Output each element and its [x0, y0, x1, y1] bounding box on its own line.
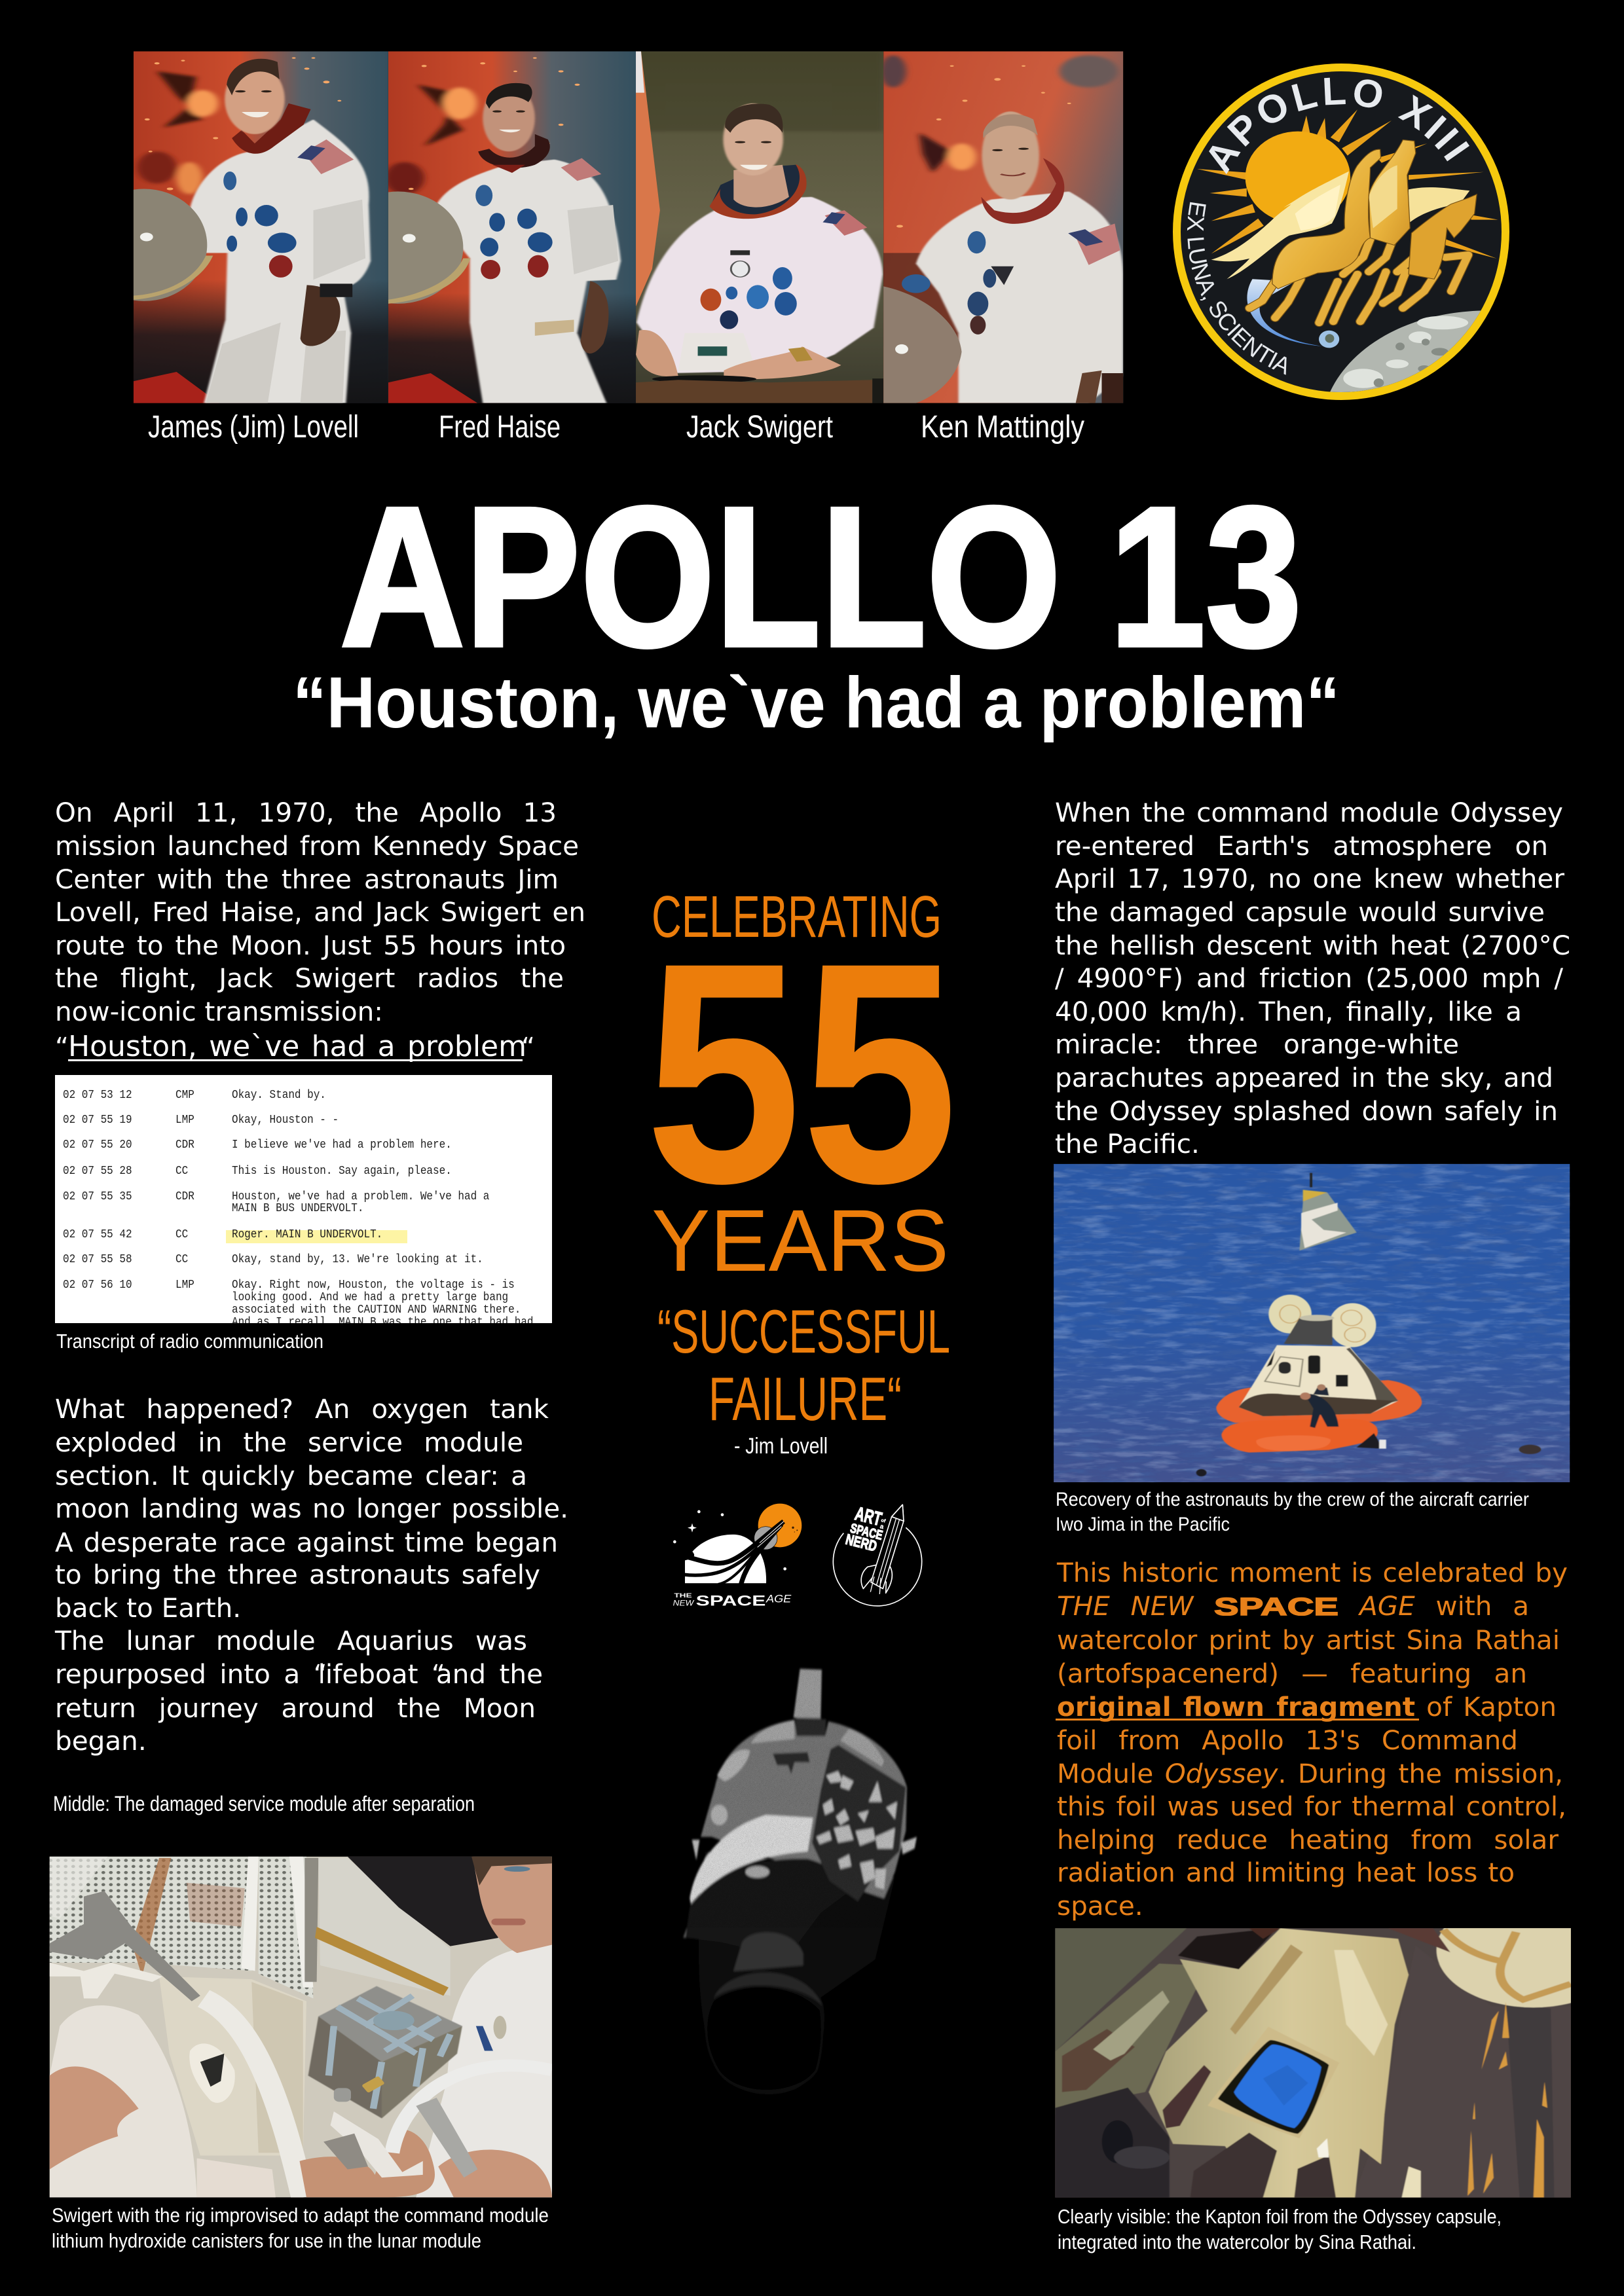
- quote: successful failure: “SUCCESSFUL: [657, 1297, 950, 1366]
- rescue basket: [1299, 1192, 1357, 1250]
- text block: what happened: What happened? An oxygen tank: [55, 1393, 549, 1425]
- patch lettering: [1187, 77, 1469, 375]
- astronaut names: Ken Mattingly: [921, 410, 1084, 445]
- logo: The New Space Age: [673, 1504, 802, 1609]
- text block: launch and transmission: now-iconic transmission:: [55, 996, 383, 1027]
- portrait: Jack Swigert: [636, 51, 883, 403]
- transcript of radio communication: CC: [175, 1228, 188, 1241]
- caption: recovery photo: Recovery of the astronauts by the crew of the aircraft carrier: [1056, 1489, 1529, 1510]
- patch lettering: EX LUNA, SCIENTIA: [1187, 202, 1287, 375]
- text block: re-entry: miracle: three orange-white: [1055, 1029, 1459, 1060]
- horses: front horse: [1272, 149, 1381, 289]
- portrait: Ken Mattingly: [880, 51, 1123, 403]
- text block: launch and transmission: Houston, we`ve had a problem: [68, 1030, 526, 1063]
- text block: historic moment celebration (orange): (artofspacenerd) — featuring an: [1057, 1658, 1527, 1689]
- text block: historic moment celebration (orange): radiation and limiting heat loss to: [1057, 1857, 1515, 1888]
- quote: successful failure: FAILURE“: [709, 1364, 902, 1433]
- astronaut names: [148, 410, 1084, 445]
- title: APOLLO 13: [340, 466, 1302, 688]
- logo: Art of a Space Nerd: [833, 1503, 922, 1606]
- logo: The New Space Age: AGE: [766, 1592, 792, 1605]
- astronaut names: James (Jim) Lovell: [148, 410, 359, 445]
- text block: what happened: return journey around the Moon: [55, 1692, 536, 1724]
- transcript of radio communication: Roger. MAIN B UNDERVOLT.: [232, 1228, 382, 1241]
- transcript of radio communication: 02 07 55 35: [63, 1190, 132, 1203]
- patch lettering: APOLLO XIII: [1209, 77, 1469, 174]
- transcript of radio communication: CC: [175, 1165, 188, 1178]
- caption: Swigert photo: lithium hydroxide canisters for use in the lunar module: [52, 2229, 481, 2252]
- centre heading: celebrating 55 years: YEARS: [652, 1192, 949, 1290]
- logo: Art of a Space Nerd: SPACE: [849, 1521, 884, 1543]
- text block: what happened: [55, 1393, 568, 1757]
- text block: re-entry: the damaged capsule would survive: [1055, 896, 1545, 928]
- logo: Art of a Space Nerd: a: [879, 1523, 885, 1531]
- text block: re-entry: 40,000 km/h). Then, finally, like a: [1055, 996, 1522, 1027]
- horses: middle horse: [1369, 140, 1416, 245]
- flotation collar: [1216, 1380, 1422, 1423]
- logo: The New Space Age: THE: [674, 1592, 692, 1599]
- transcript of radio communication: LMP: [175, 1114, 194, 1127]
- text block: launch and transmission: route to the Moon. Just 55 hours into: [55, 930, 566, 961]
- text block: re-entry: When the command module Odyssey: [1055, 797, 1563, 828]
- photo: capsule recovery in the Pacific: [1054, 1164, 1570, 1482]
- text block: what happened: repurposed into a “lifeboat “and the: [55, 1658, 543, 1690]
- text block: historic moment celebration (orange): foil from Apollo 13's Command: [1057, 1724, 1518, 1756]
- text block: historic moment celebration (orange): THE NEW AGE with a: [1057, 1590, 1529, 1622]
- transcript of radio communication: Okay, stand by, 13. We're looking at it.: [232, 1253, 483, 1266]
- transcript of radio communication: 02 07 53 12: [63, 1089, 132, 1102]
- caption: transcript: Transcript of radio communication: [56, 1330, 323, 1353]
- centre heading: celebrating 55 years: 55: [645, 897, 958, 1248]
- transcript of radio communication: 02 07 55 58: [63, 1253, 132, 1266]
- text block: historic moment celebration (orange): [1056, 1557, 1568, 1922]
- logo: The New Space Age: NEW: [673, 1599, 695, 1608]
- transcript of radio communication: looking good. And we had a pretty large bang: [232, 1291, 508, 1304]
- text block: what happened: A desperate race against time began: [55, 1527, 558, 1558]
- capsule: [1239, 1345, 1398, 1416]
- life raft: [1221, 1419, 1378, 1453]
- caption: Kapton photo: Clearly visible: the Kapton foil from the Odyssey capsule,: [1058, 2205, 1502, 2228]
- logo: Art of a Space Nerd: NERD: [844, 1531, 879, 1555]
- logo: The New Space Age: SPACE: [696, 1593, 766, 1609]
- transcript of radio communication: Okay. Stand by.: [232, 1089, 326, 1102]
- portrait: James Lovell: [134, 51, 388, 403]
- horses: right horse: [1409, 187, 1469, 223]
- transcript of radio communication: Okay. Right now, Houston, the voltage is - is: [232, 1279, 515, 1292]
- quote: successful failure: [657, 1297, 950, 1433]
- transcript of radio communication: [55, 1075, 552, 1329]
- caption: Kapton photo: integrated into the watercolor by Sina Rathai.: [1058, 2231, 1416, 2253]
- text block: launch and transmission: the flight, Jack Swigert radios the: [55, 962, 564, 994]
- text block: what happened: began.: [55, 1725, 147, 1757]
- text block: re-entry: the Pacific.: [1055, 1128, 1200, 1159]
- icon: Apollo XIII mission patch: [1173, 64, 1509, 400]
- transcript of radio communication: I believe we've had a problem here.: [232, 1139, 452, 1152]
- text block: launch and transmission: mission launched from Kennedy Space: [55, 830, 579, 862]
- text block: re-entry: the Odyssey splashed down safely in: [1055, 1095, 1558, 1127]
- text block: what happened: moon landing was no longer possible.: [55, 1493, 568, 1524]
- flotation balloons: [1268, 1294, 1312, 1334]
- logo: Art of a Space Nerd: of: [880, 1517, 887, 1524]
- transcript of radio communication: CDR: [175, 1139, 194, 1152]
- caption: service module: Middle: The damaged service module after separation: [53, 1792, 475, 1815]
- logo: Art of a Space Nerd: ART: [853, 1503, 884, 1530]
- caption: Swigert photo: [52, 2204, 549, 2252]
- transcript of radio communication: Houston, we've had a problem. We've had a: [232, 1190, 489, 1203]
- transcript of radio communication: Okay, Houston - -: [232, 1114, 339, 1127]
- text block: what happened: back to Earth.: [55, 1592, 241, 1624]
- photo: Kapton foil on watercolor: [1055, 1893, 1624, 2198]
- transcript of radio communication: LMP: [175, 1279, 194, 1292]
- text block: re-entry: [1055, 797, 1570, 1159]
- moon: [1330, 310, 1481, 392]
- caption: recovery photo: [1056, 1489, 1529, 1535]
- text block: what happened: to bring the three astronauts safely: [55, 1559, 540, 1590]
- text block: historic moment celebration (orange): original flown fragment of Kapton: [1057, 1691, 1557, 1722]
- earth and trajectory: [1247, 279, 1323, 346]
- text block: historic moment celebration (orange): watercolor print by artist Sina Rathai: [1057, 1624, 1560, 1656]
- text block: historic moment celebration (orange): helping reduce heating from solar: [1057, 1824, 1559, 1855]
- sun: [1197, 109, 1498, 259]
- transcript of radio communication: 02 07 55 28: [63, 1165, 132, 1178]
- quote attribution: - Jim Lovell: [734, 1434, 828, 1459]
- text block: what happened: exploded in the service module: [55, 1427, 523, 1458]
- text block: launch and transmission: Lovell, Fred Haise, and Jack Swigert en: [55, 896, 585, 928]
- text block: launch and transmission: [55, 797, 585, 1063]
- transcript of radio communication: associated with the CAUTION AND WARNING there.: [232, 1303, 521, 1317]
- transcript of radio communication: 02 07 55 19: [63, 1114, 132, 1127]
- text block: what happened: section. It quickly became clear: a: [55, 1460, 527, 1491]
- crew in wetsuits: [1304, 1394, 1338, 1428]
- transcript of radio communication: This is Houston. Say again, please.: [232, 1165, 452, 1178]
- text block: launch and transmission: “: [521, 1031, 535, 1063]
- horses: mane and tail: [1211, 172, 1349, 279]
- transcript of radio communication: CDR: [175, 1190, 194, 1203]
- portrait: Fred Haise: [388, 51, 636, 403]
- astronaut names: Fred Haise: [439, 410, 561, 445]
- transcript of radio communication: 02 07 56 10: [63, 1279, 132, 1292]
- text block: launch and transmission: On April 11, 1970, the Apollo 13: [55, 797, 557, 828]
- astronaut names: Jack Swigert: [686, 410, 833, 445]
- text block: launch and transmission: “: [55, 1031, 69, 1063]
- transcript of radio communication: MAIN B BUS UNDERVOLT.: [232, 1202, 363, 1215]
- centre heading: celebrating 55 years: CELEBRATING: [652, 884, 942, 950]
- text block: historic moment celebration (orange): this foil was used for thermal control,: [1057, 1791, 1566, 1822]
- caption: recovery photo: Iwo Jima in the Pacific: [1056, 1514, 1230, 1535]
- text block: historic moment celebration (orange): This historic moment is celebrated by: [1057, 1557, 1568, 1588]
- text block: historic moment celebration (orange): Module Odyssey. During the mission,: [1057, 1758, 1563, 1789]
- photo: damaged service module: [681, 1664, 921, 2094]
- transcript of radio communication: 02 07 55 20: [63, 1139, 132, 1152]
- text block: re-entry: / 4900°F) and friction (25,000 mph /: [1055, 962, 1563, 994]
- text block: re-entry: the hellish descent with heat (2700°C: [1055, 930, 1570, 961]
- text block: historic moment celebration (orange): space.: [1057, 1890, 1143, 1922]
- transcript of radio communication: CC: [175, 1253, 188, 1266]
- text block: re-entry: re-entered Earth's atmosphere on: [1055, 830, 1548, 862]
- subtitle: “Houston, we`ve had a problem“: [293, 663, 1340, 743]
- text block: launch and transmission: Center with the three astronauts Jim: [55, 864, 559, 895]
- horses: legs: [1249, 230, 1468, 323]
- transcript of radio communication: And as I recall, MAIN B was the one that had had: [232, 1316, 534, 1329]
- photo: Swigert with improvised rig: [50, 1857, 552, 2197]
- text block: re-entry: April 17, 1970, no one knew whether: [1055, 863, 1564, 894]
- text block: re-entry: parachutes appeared in the sky, and: [1055, 1062, 1553, 1093]
- transcript of radio communication: CMP: [175, 1089, 194, 1102]
- astronaut portraits: [81, 51, 1123, 403]
- transcript of radio communication: 02 07 55 42: [63, 1228, 132, 1241]
- caption: Kapton photo: [1058, 2205, 1502, 2253]
- text block: what happened: The lunar module Aquarius was: [55, 1625, 527, 1656]
- caption: Swigert photo: Swigert with the rig improvised to adapt the command module: [52, 2204, 549, 2227]
